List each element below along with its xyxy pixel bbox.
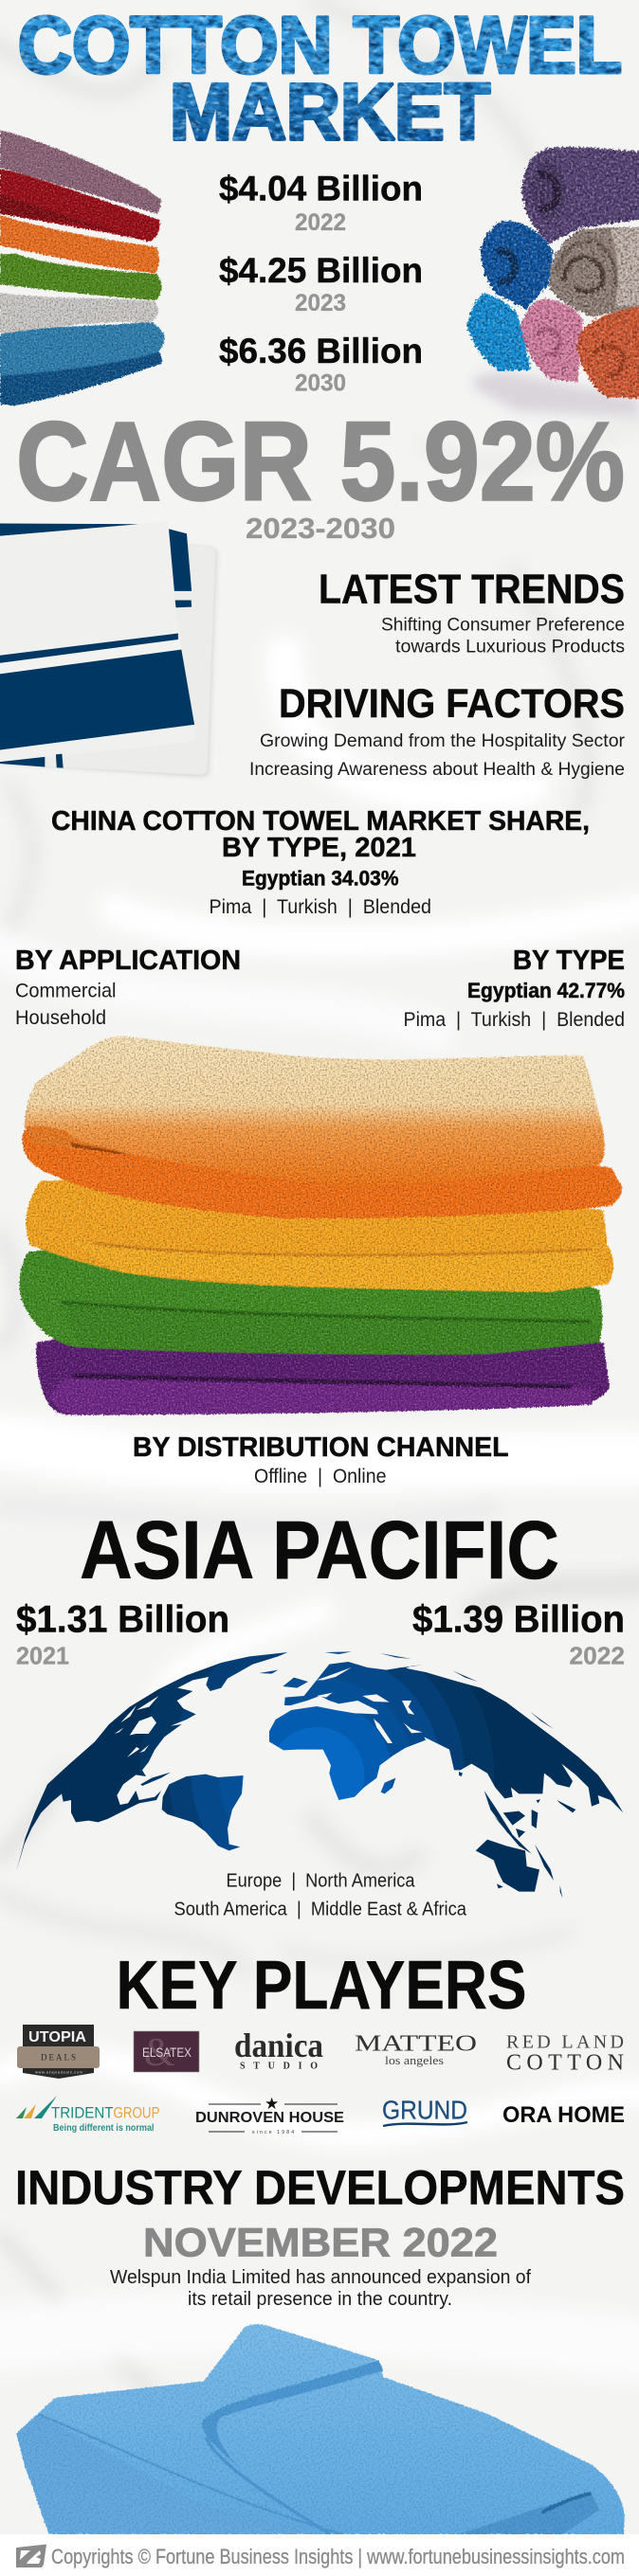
Asia Pacific value 2021: $1.31 Billion — [16, 1599, 229, 1641]
Asia Pacific value 2022 — [412, 1599, 625, 1669]
Southeast Asian islands and Japan — [484, 1791, 575, 1898]
panel: driving factors: Increasing Awareness about Health & Hygiene — [249, 760, 625, 780]
development description: Welspun India Limited has announced expansion of — [110, 2267, 531, 2288]
logo: Danica Studio: danica — [234, 2027, 323, 2064]
panel: by application: Commercial — [15, 980, 116, 1002]
Cuba — [140, 1773, 171, 1786]
logo: Red Land Cotton — [506, 2031, 624, 2075]
panel: driving factors — [249, 681, 626, 780]
other regions list: South America | Middle East & Africa — [174, 1899, 467, 1919]
logo: Matteo Los Angeles — [355, 2031, 477, 2067]
logo: Red Land Cotton: RED LAND — [506, 2031, 624, 2052]
image: stack of coloured towels, left — [0, 130, 165, 405]
logo: Grund: GRUND — [382, 2096, 467, 2124]
panel: China market share by type: CHINA COTTON TOWEL MARKET SHARE, — [51, 806, 590, 837]
icon: Fortune Business Insights mark — [16, 2545, 46, 2567]
Asia Pacific value 2022: $1.39 Billion — [412, 1599, 625, 1641]
logo: Dunroven House: ★ — [265, 2095, 279, 2113]
image: folded white towel with navy stripes — [0, 520, 217, 777]
image: folded blue towel — [16, 2324, 625, 2534]
footer bar — [0, 2534, 639, 2576]
logo: Utopia Deals: UTOPIA — [28, 2029, 86, 2045]
panel: by type — [404, 946, 625, 1031]
market value 2022: $4.04 Billion — [219, 169, 423, 208]
Eurasia and Africa — [269, 1662, 623, 1812]
market value 2023: 2023 — [295, 290, 346, 316]
other regions list — [174, 1870, 467, 1919]
logo: Utopia Deals: www.utopiadeals.com — [35, 2069, 83, 2075]
development description — [110, 2267, 531, 2310]
logo: Ora Home: ORA HOME — [502, 2102, 625, 2128]
logo: Dunroven House — [195, 2095, 344, 2135]
logo: Utopia Deals: DEALS — [41, 2052, 76, 2062]
panel: China market share by type — [51, 806, 590, 918]
Asia Pacific value 2021 — [16, 1599, 229, 1669]
market value 2022: 2022 — [295, 209, 346, 236]
panel: by distribution channel: Offline | Online — [254, 1466, 387, 1487]
market value 2030: $6.36 Billion — [219, 332, 423, 370]
logo: Dunroven House: since 1984 — [252, 2130, 294, 2135]
development description: its retail presence in the country. — [188, 2289, 452, 2310]
logo: Danica Studio: STUDIO — [240, 2062, 318, 2071]
Sri Lanka — [459, 1772, 463, 1776]
panel: China market share by type: Egyptian 34.03% — [242, 866, 398, 891]
logo: Elsatex: ELSATEX — [142, 2045, 192, 2060]
logo: Dunroven House: DUNROVEN HOUSE — [195, 2110, 344, 2126]
panel: latest trends: Shifting Consumer Preference — [381, 616, 625, 635]
panel: latest trends: towards Luxurious Products — [395, 637, 625, 658]
other regions list: Europe | North America — [226, 1870, 415, 1891]
market value 2023 — [219, 251, 423, 316]
logo: Trident Group — [16, 2096, 159, 2134]
Asia Pacific value 2022: 2022 — [569, 1641, 625, 1669]
North America and Greenland — [16, 1652, 287, 1871]
image: rolled towels, right — [466, 147, 639, 417]
panel: by type: Egyptian 42.77% — [467, 979, 625, 1002]
panel: by application — [15, 946, 241, 1029]
logo: Red Land Cotton: COTTON — [506, 2050, 624, 2075]
Iceland — [259, 1670, 278, 1674]
CAGR figure: 2023-2030 — [246, 512, 395, 545]
panel: by distribution channel — [133, 1432, 508, 1487]
panel: by application: Household — [15, 1007, 106, 1029]
heading: Asia Pacific: ASIA PACIFIC — [80, 1504, 559, 1596]
logo: Trident Group: TRIDENT — [51, 2103, 114, 2122]
panel: by type: Pima | Turkish | Blended — [404, 1009, 625, 1031]
South America — [162, 1774, 244, 1850]
British Isles — [283, 1678, 308, 1688]
Australia — [476, 1840, 539, 1892]
logo: Utopia Deals — [17, 2025, 100, 2079]
image: stack of orange, yellow, green and purple towels — [19, 1036, 622, 1415]
panel: latest trends — [319, 567, 625, 658]
market value 2023: $4.25 Billion — [219, 251, 423, 290]
logo: Trident Group: Being different is normal — [53, 2122, 155, 2134]
market value 2030 — [219, 332, 423, 396]
logo: Elsatex: & — [144, 2031, 175, 2075]
panel: driving factors: Growing Demand from the Hospitality Sector — [260, 731, 626, 751]
logo: Elsatex — [134, 2031, 199, 2075]
Asia Pacific value 2021: 2021 — [16, 1641, 69, 1669]
title: Cotton Towel Market: MARKET — [170, 67, 490, 156]
seas and lakes cut out of the continents — [115, 1667, 423, 1757]
development date: NOVEMBER 2022 — [143, 2221, 498, 2266]
Madagascar — [381, 1778, 395, 1793]
Arctic islands — [324, 1651, 554, 1729]
panel: China market share by type: Pima | Turkish | Blended — [209, 896, 431, 918]
panel: by type: BY TYPE — [513, 946, 625, 976]
logo: Trident Group: GROUP — [114, 2103, 159, 2122]
heading: key players: KEY PLAYERS — [116, 1948, 527, 2024]
logo: Matteo Los Angeles: MATTEO — [355, 2031, 477, 2056]
market value 2030: 2030 — [295, 369, 346, 396]
title: Cotton Towel Market — [18, 0, 622, 156]
panel: China market share by type: BY TYPE, 2021 — [222, 833, 416, 863]
panel: by distribution channel: BY DISTRIBUTION CHANNEL — [133, 1432, 508, 1463]
logo: Matteo Los Angeles: los angeles — [385, 2053, 444, 2067]
panel: by application: BY APPLICATION — [15, 946, 241, 976]
market value 2022 — [219, 169, 423, 236]
world map — [16, 1651, 623, 1898]
